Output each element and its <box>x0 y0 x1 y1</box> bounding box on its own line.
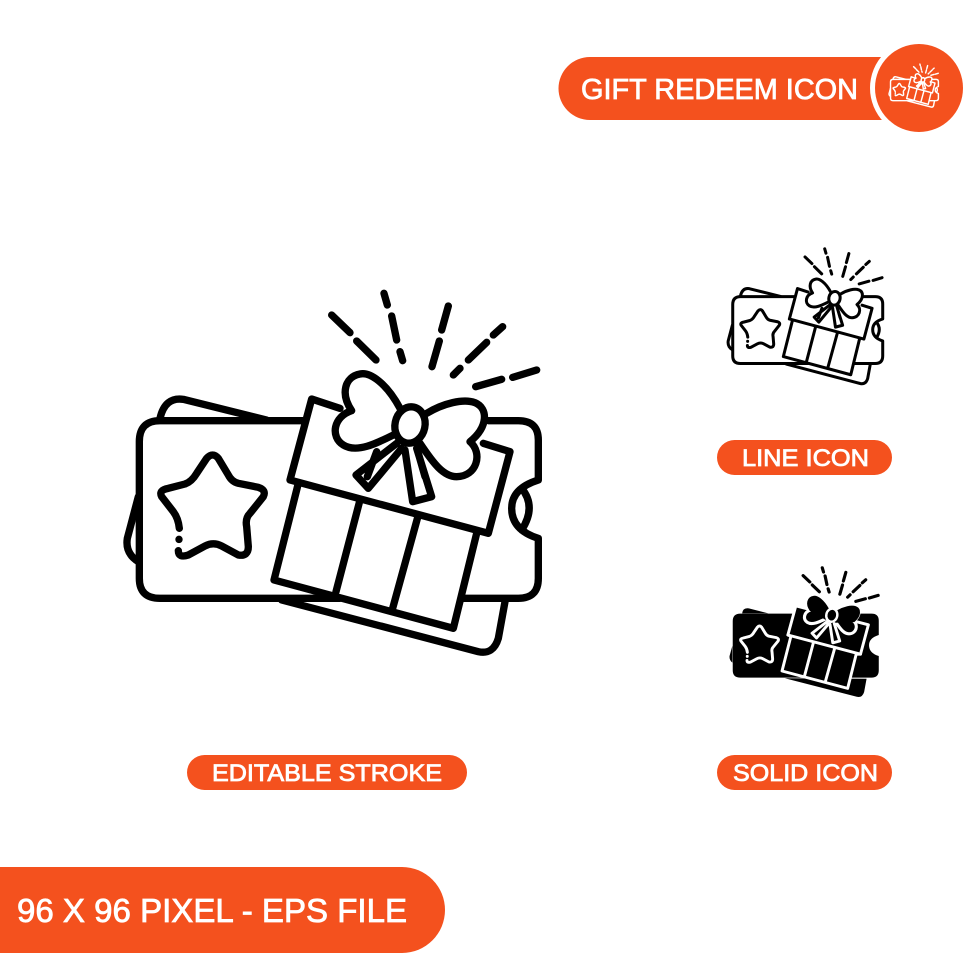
editable stroke label <box>187 755 467 790</box>
header badge: gift redeem icon <box>559 39 968 137</box>
solid ribbon tails <box>812 622 840 643</box>
solid sparkle rays <box>803 568 878 601</box>
gift box lid <box>290 399 510 533</box>
header pill <box>559 57 885 120</box>
solid icon label <box>717 755 892 790</box>
solid box lines <box>788 635 860 681</box>
front ticket <box>139 421 538 598</box>
solid icon label: SOLID ICON <box>733 760 878 787</box>
editable stroke label: EDITABLE STROKE <box>212 760 442 787</box>
star <box>161 455 264 556</box>
footer badge: file size: 96 X 96 PIXEL - EPS FILE <box>17 892 407 929</box>
ribbon tails <box>356 443 432 502</box>
main line icon: gift and tickets <box>127 293 538 652</box>
back ticket <box>127 399 505 652</box>
icon: small white gift in circle <box>889 64 938 107</box>
sparkle rays <box>332 293 537 387</box>
line icon label <box>717 440 892 475</box>
solid gift box <box>782 606 868 688</box>
solid bow <box>804 597 859 634</box>
solid front ticket <box>733 614 879 678</box>
line icon small <box>728 249 883 384</box>
header pill text: GIFT REDEEM ICON <box>581 74 858 106</box>
solid back ticket <box>730 608 867 697</box>
bow <box>335 374 484 477</box>
line icon label: LINE ICON <box>742 445 869 472</box>
solid icon <box>730 568 879 697</box>
orange circle <box>875 44 963 132</box>
solid star <box>741 626 778 662</box>
gift box body <box>274 483 477 628</box>
footer badge: file size <box>0 867 445 953</box>
white ring behind circle <box>870 39 968 137</box>
